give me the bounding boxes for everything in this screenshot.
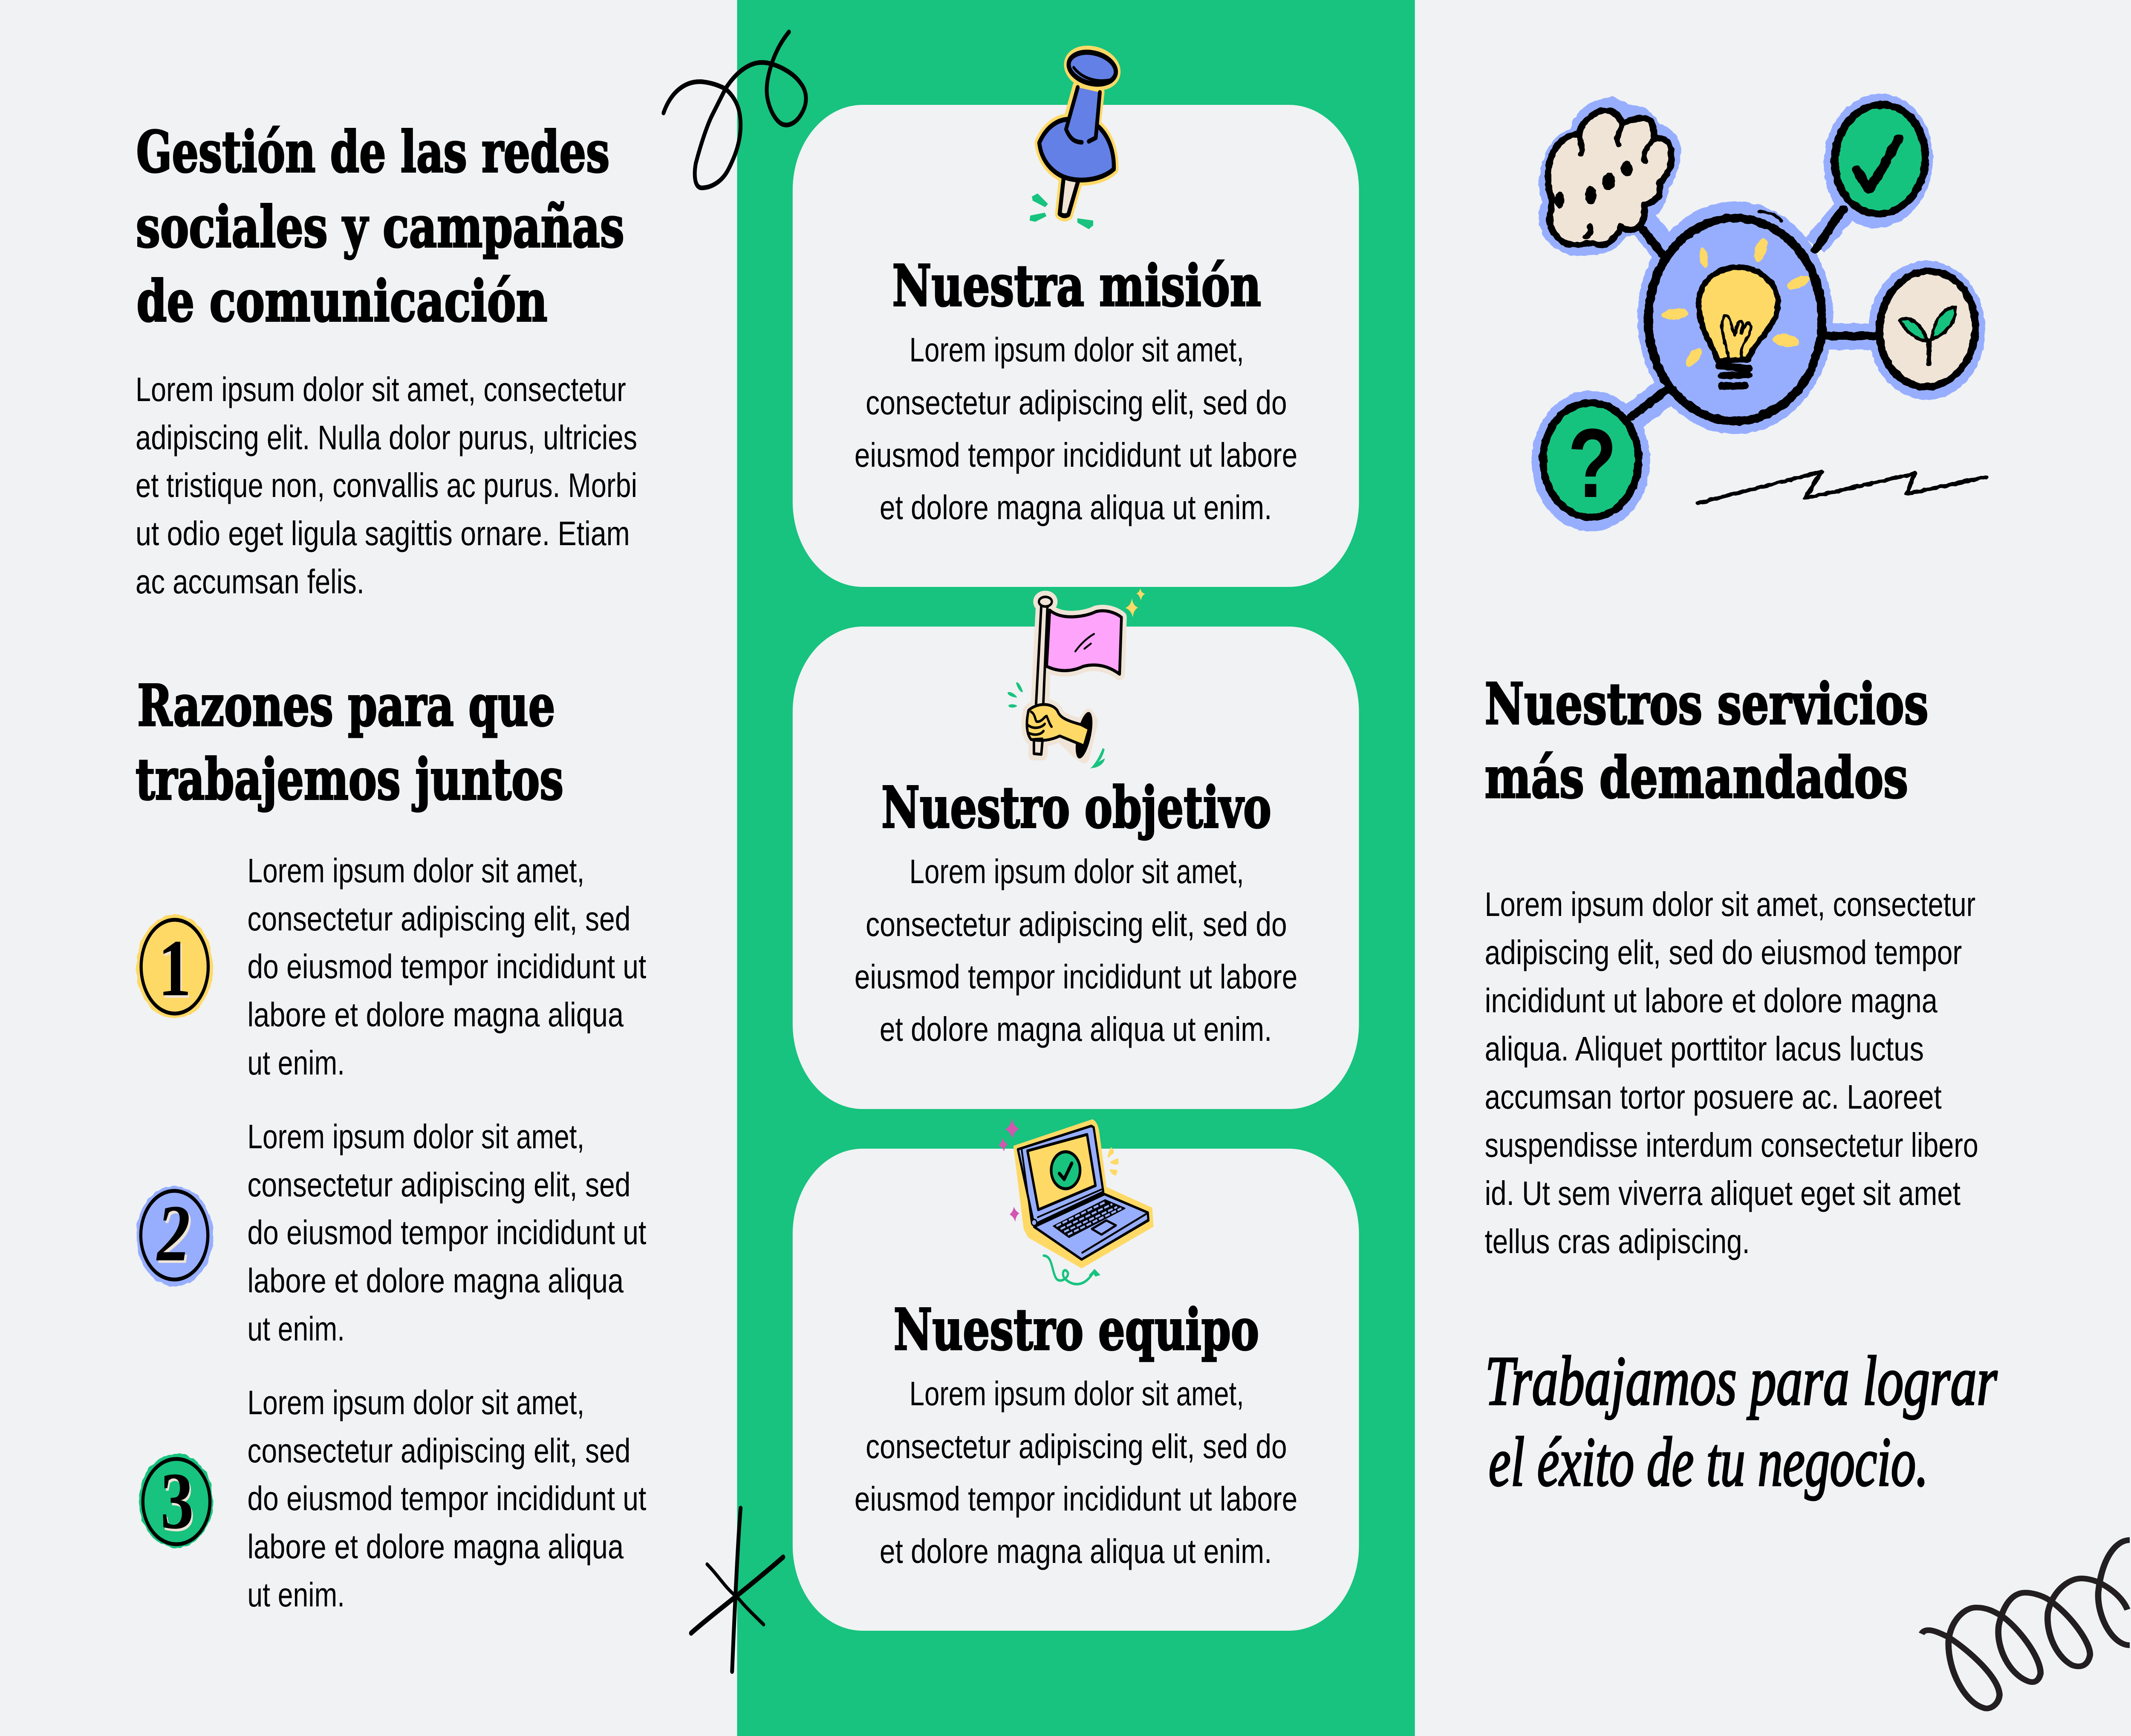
heading: razones para que trabajemos juntos: trabajemos juntos [136,746,563,813]
text block: objetivo paragraph [855,853,1297,1048]
icon: idea network illustration: ? [1568,408,1617,518]
heading: razones para que trabajemos juntos [136,672,563,813]
script tagline: el éxito de tu negocio. [1489,1423,1929,1501]
text block: servicios paragraph: aliqua. Aliquet porttitor lacus luctus [1485,1030,1924,1068]
list text 2: Lorem ipsum dolor sit amet, [247,1118,584,1155]
text block: servicios paragraph: accumsan tortor posuere ac. Laoreet [1485,1078,1942,1116]
heading: nuestros servicios más demandados: más demandados [1485,744,1908,811]
list text 1: labore et dolore magna aliqua [247,996,624,1034]
list text 2: do eiusmod tempor incididunt ut [247,1214,646,1251]
heading: gestión de las redes: Gestión de las redes [136,118,609,185]
text block: misión paragraph: consectetur adipiscing elit, sed do [866,384,1287,422]
text block: objetivo paragraph: et dolore magna aliqua ut enim. [880,1011,1272,1048]
decorative spiral bottom right [1922,1540,2130,1708]
text block: misión paragraph: eiusmod tempor incididunt ut labore [855,436,1297,474]
card: nuestra misión [793,105,1359,587]
heading: nuestros servicios más demandados [1485,670,1929,811]
icon: number 2 badge [136,1186,213,1286]
icon: number 2 badge: 2 [156,1188,190,1278]
text block: equipo paragraph: eiusmod tempor incididunt ut labore [855,1480,1297,1518]
text block: servicios paragraph: id. Ut sem viverra aliquet eget sit amet [1485,1175,1961,1212]
text block: equipo paragraph: consectetur adipiscing elit, sed do [866,1428,1287,1465]
panel: green central column [737,0,1415,1736]
card: nuestro equipo [793,1149,1359,1631]
decorative star scribble [691,1508,783,1672]
text block: intro paragraph: ut odio eget ligula sagittis ornare. Etiam [136,515,630,552]
heading: nuestros servicios más demandados: Nuestros servicios [1485,670,1929,737]
list text 3: ut enim. [247,1576,345,1614]
heading: gestión de las redes [136,118,624,335]
text block: servicios paragraph: Lorem ipsum dolor sit amet, consectetur [1485,886,1975,923]
text block: objetivo paragraph: eiusmod tempor incididunt ut labore [855,958,1297,996]
list text 1: Lorem ipsum dolor sit amet, [247,852,584,890]
list text 3: Lorem ipsum dolor sit amet, [247,1384,584,1421]
list text 1: do eiusmod tempor incididunt ut [247,948,646,985]
heading: nuestro equipo: Nuestro equipo [894,1296,1259,1363]
text block: equipo paragraph [855,1375,1297,1570]
heading: razones para que trabajemos juntos: Razones para que [137,672,555,739]
list text 2: consectetur adipiscing elit, sed [247,1166,631,1204]
text block: servicios paragraph: suspendisse interdum consectetur libero [1485,1127,1978,1164]
decorative scribble top [664,32,806,188]
text block: servicios paragraph [1485,886,1978,1260]
text block: servicios paragraph: tellus cras adipiscing. [1485,1223,1750,1260]
list text 2: labore et dolore magna aliqua [247,1262,624,1300]
text block: equipo paragraph: et dolore magna aliqua ut enim. [880,1533,1272,1570]
script tagline: Trabajamos para lograr [1485,1342,1998,1420]
text block: intro paragraph: et tristique non, convallis ac purus. Morbi [136,467,637,504]
list text 3: labore et dolore magna aliqua [247,1528,624,1566]
list text 1: ut enim. [247,1044,345,1082]
text block: servicios paragraph: adipiscing elit, sed do eiusmod tempor [1485,934,1962,971]
icon: number 3 badge: 3 [162,1458,195,1548]
text block: intro paragraph: ac accumsan felis. [136,563,364,601]
text block: intro paragraph [136,371,637,601]
list text 2: ut enim. [247,1310,345,1348]
text block: objetivo paragraph: Lorem ipsum dolor sit amet, [910,853,1244,890]
heading: gestión de las redes: sociales y campañas [136,194,624,260]
heading: gestión de las redes: de comunicación [136,268,547,335]
text block: misión paragraph [855,331,1297,526]
heading: nuestra misión: Nuestra misión [892,252,1261,319]
text block: objetivo paragraph: consectetur adipiscing elit, sed do [866,906,1287,943]
list text 2 [247,1118,646,1348]
icon: number 1 badge: 1 [158,923,191,1013]
card: nuestro objetivo [793,627,1359,1109]
icon: idea network illustration [1532,90,1986,531]
list text 3: consectetur adipiscing elit, sed [247,1432,631,1470]
list text 1: consectetur adipiscing elit, sed [247,900,631,938]
icon: push pin [1030,47,1118,229]
text block: misión paragraph: et dolore magna aliqua ut enim. [880,489,1272,526]
script tagline [1485,1342,1998,1501]
icon: number 2 badge: 2 [158,1190,192,1281]
text block: intro paragraph: Lorem ipsum dolor sit amet, consectetur [136,371,626,408]
text block: servicios paragraph: incididunt ut labore et dolore magna [1485,982,1938,1020]
icon: number 3 badge [139,1454,213,1548]
list text 3 [247,1384,646,1614]
icon: number 3 badge: 3 [161,1456,194,1546]
list text 3: do eiusmod tempor incididunt ut [247,1480,646,1517]
text block: intro paragraph: adipiscing elit. Nulla dolor purus, ultricies [136,419,637,456]
icon: number 1 badge: 1 [159,925,193,1016]
heading: nuestro objetivo: Nuestro objetivo [881,774,1271,841]
list text 1 [247,852,646,1082]
icon: laptop with check [999,1118,1152,1284]
text block: equipo paragraph: Lorem ipsum dolor sit amet, [910,1375,1244,1412]
icon: number 1 badge [136,915,213,1019]
text block: misión paragraph: Lorem ipsum dolor sit amet, [910,331,1244,369]
icon: flag held by hand [1008,588,1145,768]
